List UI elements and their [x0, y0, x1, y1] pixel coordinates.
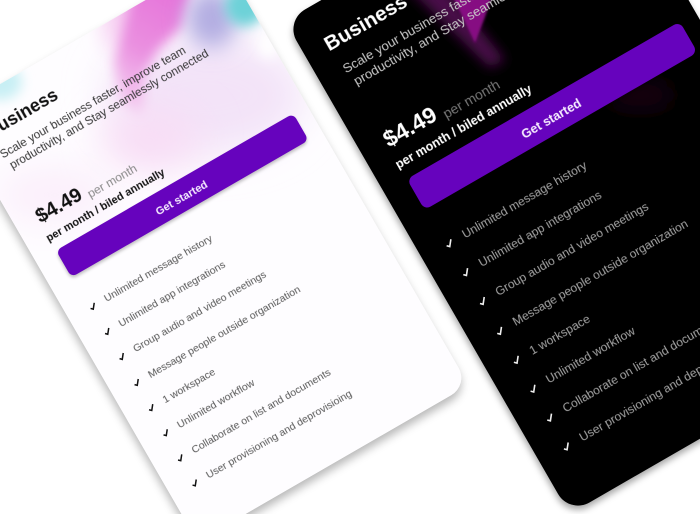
feature list: Message people outside organization — [146, 284, 303, 381]
feature list: Unlimited message history — [102, 233, 215, 305]
price: $4.49 — [379, 102, 442, 153]
feature list: Unlimited app integrations — [117, 259, 228, 330]
billing note: per month / biled annually — [44, 167, 167, 245]
feature list: User provisioning and deprovisioing — [204, 388, 354, 481]
button: get started — [56, 113, 309, 277]
feature list: 1 workspace — [527, 312, 593, 358]
feature list — [446, 159, 700, 451]
panel: light pricing card: productivity, and Stay seamlessly connected — [8, 47, 211, 172]
feature list — [90, 233, 354, 487]
feature list: Message people outside organization — [510, 217, 691, 329]
price unit: per month — [440, 76, 503, 122]
feature list: Group audio and video meetings — [131, 269, 268, 355]
button: get started: Get started — [154, 179, 210, 218]
feature list: Collaborate on list and documents — [190, 366, 333, 456]
panel: light pricing card — [0, 0, 466, 514]
feature list: Unlimited message history — [460, 159, 589, 241]
feature list: 1 workspace — [161, 366, 218, 406]
feature list: Unlimited workflow — [175, 377, 257, 431]
price unit: per month — [85, 161, 139, 201]
price: $4.49 — [32, 184, 86, 228]
panel: dark pricing card — [289, 0, 700, 514]
feature list: Unlimited app integrations — [476, 189, 604, 270]
feature list: Unlimited workflow — [544, 325, 638, 387]
billing note: per month / biled annually — [393, 83, 535, 172]
feature list: Group audio and video meetings — [493, 200, 651, 299]
description: Scale your business faster, improve team — [0, 44, 188, 161]
button: get started — [407, 22, 698, 210]
button: get started: Get started — [519, 97, 584, 142]
